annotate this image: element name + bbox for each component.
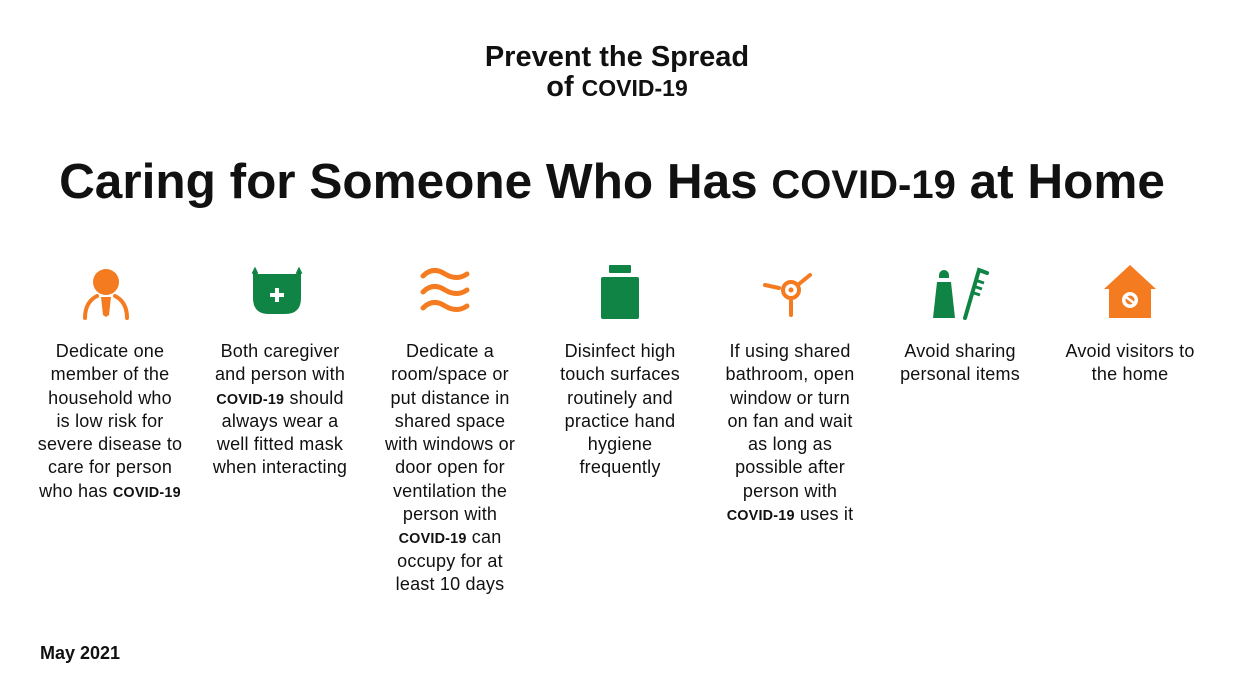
title: Caring for Someone Who Has COVID-19 at Home: [59, 154, 1165, 209]
icon: person: [83, 269, 129, 320]
text: col3: COVID-19 can: [399, 527, 501, 547]
header: prevent the spread: of COVID-19: [546, 71, 688, 103]
icon: house no visitors: [1104, 265, 1156, 318]
text: col5: person with: [743, 481, 837, 501]
text: col1: [38, 341, 182, 501]
text: col3: least 10 days: [396, 574, 504, 594]
text: col2: well fitted mask: [217, 434, 343, 454]
text: col5: window or turn: [730, 388, 850, 408]
text: col2: always wear a: [222, 411, 338, 431]
text: col3: [385, 341, 515, 594]
text: col2: when interacting: [213, 457, 347, 477]
text: col1: is low risk for: [56, 411, 164, 431]
text: col5: [726, 341, 854, 524]
text: col7: [1065, 341, 1195, 384]
text: col4: practice hand: [565, 411, 675, 431]
text: col6: Avoid sharing: [904, 341, 1016, 361]
text: col3: ventilation the: [393, 481, 507, 501]
header: prevent the spread: [485, 41, 749, 103]
text: col5: bathroom, open: [726, 364, 854, 384]
text: col3: with windows or: [385, 434, 515, 454]
text: col7: Avoid visitors to: [1065, 341, 1195, 361]
icon: personal items: [933, 267, 990, 320]
text: col5: on fan and wait: [727, 411, 853, 431]
text: col1: care for person: [48, 457, 172, 477]
icon: fan: [763, 272, 812, 317]
header: prevent the spread: Prevent the Spread: [485, 41, 749, 73]
text: col6: [900, 341, 1020, 384]
text: col5: COVID-19 uses it: [727, 504, 853, 524]
icon: air waves: [420, 268, 470, 312]
text: col3: Dedicate a: [406, 341, 494, 361]
text: col1: Dedicate one: [56, 341, 164, 361]
text: col1: household who: [48, 388, 172, 408]
text: col4: Disinfect high: [565, 341, 675, 361]
date: May 2021: [40, 643, 120, 663]
text: col5: If using shared: [729, 341, 851, 361]
text: col1: severe disease to: [38, 434, 182, 454]
text: col3: person with: [403, 504, 497, 524]
text: col4: hygiene: [588, 434, 652, 454]
text: col1: member of the: [51, 364, 169, 384]
text: col3: room/space or: [391, 364, 509, 384]
text: col4: frequently: [579, 457, 661, 477]
text: col7: the home: [1092, 364, 1168, 384]
icon: disinfectant bottle: [601, 265, 639, 319]
text: col3: shared space: [395, 411, 505, 431]
text: col5: possible after: [735, 457, 845, 477]
text: col4: routinely and: [567, 388, 673, 408]
text: col2: and person with: [215, 364, 345, 384]
text: col4: [560, 341, 680, 477]
text: col2: Both caregiver: [221, 341, 339, 361]
text: col3: put distance in: [390, 388, 510, 408]
text: col5: as long as: [748, 434, 832, 454]
text: col3: door open for: [395, 457, 505, 477]
text: col4: touch surfaces: [560, 364, 680, 384]
text: col2: COVID-19 should: [216, 388, 344, 408]
text: col1: who has COVID-19: [39, 481, 181, 501]
text: col3: occupy for at: [397, 551, 503, 571]
text: col6: personal items: [900, 364, 1020, 384]
text: col2: [212, 341, 347, 477]
icon: mask: [252, 266, 302, 314]
